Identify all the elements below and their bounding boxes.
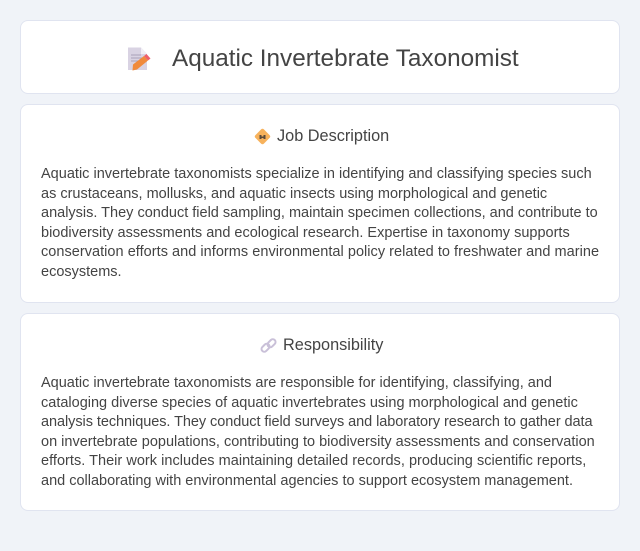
text block: job description: as crustaceans, mollusks, and aquatic insects using morphological and genetic (41, 186, 547, 202)
heading: job description: Job Description (277, 127, 389, 145)
text block: responsibility: efforts. Their work includes maintaining detailed records, producing scientific reports, (41, 453, 586, 469)
text block: job description: conservation efforts and informs environmental policy related to freshwater and marine (41, 244, 599, 260)
icon: document with pencil (128, 48, 150, 70)
text block: job description: biodiversity assessments and ecological research. Expertise in taxonomy supports (41, 225, 570, 241)
panel: responsibility (20, 313, 620, 511)
icon: chain link (260, 338, 276, 353)
panel: title card (20, 20, 620, 94)
text block: responsibility: and collaborating with environmental agencies to support ecosystem management. (41, 473, 573, 489)
text block: responsibility: Aquatic invertebrate taxonomists are responsible for identifying, classifying, and (41, 375, 552, 391)
text block: job description: Aquatic invertebrate taxonomists specialize in identifying and classifying species such (41, 166, 592, 182)
text block: responsibility: cataloging diverse species of aquatic invertebrates using morphological and genetic (41, 395, 578, 411)
text block: responsibility: analysis techniques. They conduct field surveys and laboratory research to gather data (41, 414, 593, 430)
text block: job description: ecosystems. (41, 264, 122, 280)
panel: job description (20, 104, 620, 303)
text block: responsibility: on invertebrate populations, contributing to biodiversity assessments and conservation (41, 434, 595, 450)
title: Aquatic Invertebrate Taxonomist (172, 45, 519, 72)
text block: job description: analysis. They conduct field sampling, maintain specimen collections, and contribute to (41, 205, 598, 221)
heading: responsibility: Responsibility (283, 336, 383, 354)
icon: job description diamond (254, 128, 270, 144)
